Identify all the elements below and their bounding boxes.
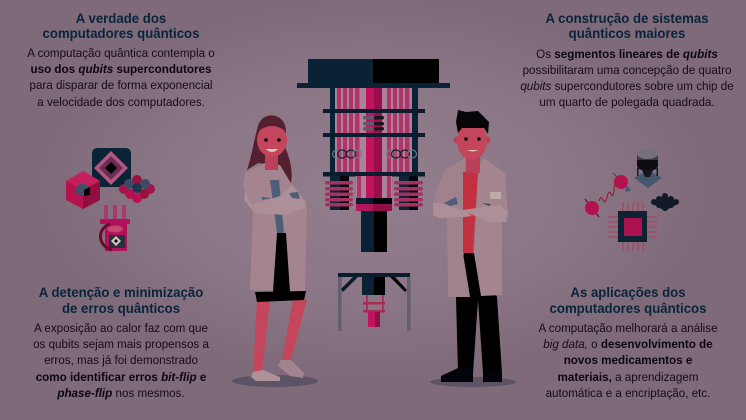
text block: A verdade dos computadores quânticos: A computação quântica contempla o bbox=[27, 46, 215, 60]
text block: As aplicações dos computadores quânticos: As aplicações dos bbox=[570, 285, 686, 300]
text block: A verdade dos computadores quânticos: A verdade dos bbox=[76, 11, 167, 26]
text block: As aplicações dos computadores quânticos: materiais, a aprendizagem bbox=[558, 370, 699, 384]
hair bbox=[247, 115, 292, 186]
cross bars bbox=[323, 109, 425, 176]
icon: dark dot grid bbox=[651, 193, 679, 211]
man scientist bbox=[430, 110, 516, 387]
text block: A verdade dos computadores quânticos: a velocidade dos computadores. bbox=[37, 95, 205, 109]
crossed arms bbox=[244, 185, 306, 215]
text block: As aplicações dos computadores quânticos: novos medicamentos e bbox=[564, 353, 693, 367]
text block: As aplicações dos computadores quânticos: big data, o desenvolvimento de bbox=[543, 337, 713, 351]
text block: A construção de sistemas quânticos maiores: A construção de sistemas bbox=[545, 11, 709, 26]
text block: A detenção e minimização de erros quânticos: erros, mas já foi demonstrado bbox=[44, 353, 198, 367]
text block: A detenção e minimização de erros quânticos: de erros quânticos bbox=[62, 301, 180, 316]
ground shadow bbox=[232, 375, 318, 387]
text block: As aplicações dos computadores quânticos bbox=[538, 285, 718, 400]
text block: A detenção e minimização de erros quânticos: como identificar erros bit-flip e bbox=[36, 370, 207, 384]
text block: A verdade dos computadores quânticos: uso dos qubits supercondutores bbox=[31, 62, 212, 76]
text block: A detenção e minimização de erros quânticos: A exposição ao calor faz com que bbox=[34, 321, 208, 335]
text block: A construção de sistemas quânticos maiores: possibilitaram uma concepção de quatro bbox=[523, 63, 732, 77]
shirt and skirt bbox=[255, 180, 306, 302]
text block: A construção de sistemas quânticos maiores: Os segmentos lineares de qubits bbox=[536, 47, 718, 61]
text block: A construção de sistemas quânticos maiores bbox=[520, 11, 734, 109]
text block: A verdade dos computadores quânticos: computadores quânticos bbox=[43, 26, 200, 41]
icons: left cluster bbox=[66, 148, 155, 251]
text block: A detenção e minimização de erros quânticos bbox=[33, 285, 209, 400]
icon: cryostat cylinder bbox=[634, 149, 662, 188]
text block: A detenção e minimização de erros quânticos: os qubits sejam mais propensos a bbox=[33, 337, 209, 351]
ground shadow bbox=[430, 377, 516, 387]
quantum computer machine bbox=[297, 59, 450, 331]
top housing bbox=[297, 59, 450, 88]
legs and shoes bbox=[251, 299, 307, 381]
woman scientist bbox=[232, 115, 318, 387]
text block: A construção de sistemas quânticos maiores: quânticos maiores bbox=[569, 26, 686, 41]
icon: dark chip with diamond bbox=[92, 148, 131, 187]
striped core bbox=[330, 88, 418, 176]
centre stack bbox=[363, 116, 384, 130]
text block: As aplicações dos computadores quânticos: computadores quânticos bbox=[550, 301, 707, 316]
crossed arms bbox=[433, 192, 508, 222]
text block: A detenção e minimização de erros quânticos: A detenção e minimização bbox=[39, 285, 203, 300]
coat bbox=[433, 158, 508, 297]
lower core bbox=[356, 176, 392, 252]
lower stand bbox=[338, 273, 410, 331]
icon: processor chip bbox=[608, 202, 657, 251]
red shirt bbox=[463, 172, 478, 253]
text block: A verdade dos computadores quânticos bbox=[27, 11, 215, 109]
text block: As aplicações dos computadores quânticos: A computação melhorará a análise bbox=[538, 321, 718, 335]
text block: A verdade dos computadores quânticos: para disparar de forma exponencial bbox=[30, 78, 212, 92]
side coils bbox=[325, 176, 423, 210]
icon: sphere cluster bbox=[119, 175, 155, 203]
coil rings bbox=[332, 150, 416, 158]
icon: magenta cube bbox=[66, 171, 100, 209]
head bbox=[257, 122, 287, 170]
head and hair bbox=[454, 110, 490, 173]
trousers and shoes bbox=[441, 253, 502, 382]
text block: A construção de sistemas quânticos maiores: qubits supercondutores sobre um chip de bbox=[520, 79, 734, 93]
icon: entangled qubits bbox=[585, 173, 631, 217]
text block: A construção de sistemas quânticos maiores: um quarto de polegada quadrada. bbox=[539, 95, 715, 109]
icon: qubit device bbox=[100, 205, 130, 251]
icons: right cluster bbox=[585, 149, 679, 251]
coat bbox=[243, 163, 307, 292]
text block: A detenção e minimização de erros quânticos: phase-flip nos mesmos. bbox=[56, 386, 185, 400]
text block: As aplicações dos computadores quânticos: automática e a encriptação, etc. bbox=[546, 386, 710, 400]
